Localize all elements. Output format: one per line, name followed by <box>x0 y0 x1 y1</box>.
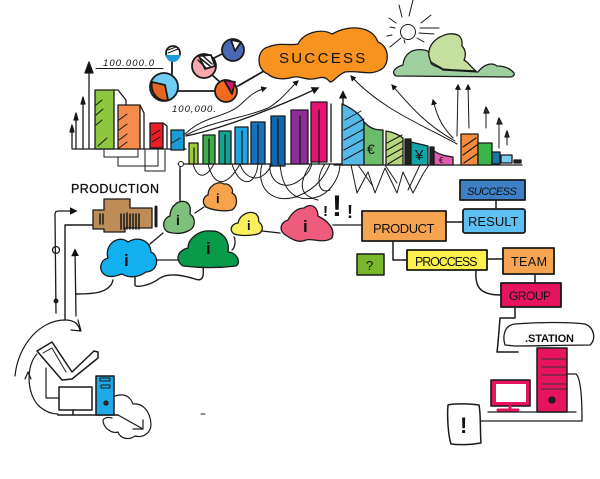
alert box <box>448 404 481 445</box>
cloud outline with arrow <box>103 395 151 439</box>
exclamation marks: ! <box>323 203 328 220</box>
info cloud: orange: i <box>216 191 220 206</box>
success cloud <box>259 28 387 82</box>
chart: currency area: € <box>367 141 375 157</box>
chart: currency area: € <box>439 156 444 165</box>
info cloud: blue: i <box>124 251 129 270</box>
zigzag lines <box>351 165 429 193</box>
exclamation marks <box>323 190 353 223</box>
pie network <box>150 39 264 102</box>
trend arrows <box>185 81 318 136</box>
production factory <box>65 199 156 320</box>
box: proccess: PROCCESS <box>415 255 479 269</box>
computer: tower <box>537 348 582 420</box>
info cloud: light green: i <box>176 212 180 228</box>
chart: currency area <box>334 92 522 165</box>
sun <box>387 0 439 47</box>
clouds <box>394 34 514 77</box>
connectors <box>393 200 535 352</box>
loops under chart <box>178 162 340 205</box>
box: question <box>357 254 384 275</box>
devices: laptop, monitor, tower <box>25 342 118 415</box>
info cloud: pink: i <box>303 217 308 236</box>
chart: rainbow bars <box>178 102 342 166</box>
success cloud: SUCCESS <box>279 50 368 67</box>
info cloud: dark green: i <box>206 239 211 258</box>
station bubble: .STATION <box>525 333 575 345</box>
box: success: SUCCESS <box>467 186 518 198</box>
label: 100.000.0: 100.000.0 <box>103 58 155 69</box>
arrow: circular top left <box>15 320 81 376</box>
upward arrows <box>351 76 469 144</box>
chart: left column bars <box>70 62 186 171</box>
exclamation marks: ! <box>332 190 342 223</box>
info cloud: pink <box>281 206 333 241</box>
box: result: RESULT <box>468 214 520 229</box>
box: team: TEAM <box>511 255 548 269</box>
label: 100,000: 100,000. <box>172 104 217 115</box>
box: question: ? <box>366 258 373 273</box>
info cloud: light green <box>164 201 194 233</box>
heading: production: PRODUCTION <box>71 182 160 196</box>
info cloud: orange <box>203 183 236 211</box>
box: result <box>463 209 525 233</box>
box: success <box>460 180 525 200</box>
info cloud: yellow: i <box>247 218 251 233</box>
info cloud: blue <box>101 239 157 277</box>
exclamation marks: ! <box>347 202 353 222</box>
flow arrows left <box>52 170 362 316</box>
alert box: ! <box>460 413 467 438</box>
box: product: PRODUCT <box>373 221 436 236</box>
box: group: GROUP <box>509 289 552 303</box>
box: proccess <box>407 250 487 270</box>
info cloud: dark green <box>178 231 238 268</box>
box: team <box>503 248 554 274</box>
chart: currency area: ¥ <box>414 147 424 164</box>
box: product <box>362 211 446 241</box>
box: group <box>501 283 561 307</box>
chart: right bars <box>461 107 521 165</box>
station bubble <box>504 322 594 346</box>
info cloud: yellow <box>231 212 262 236</box>
specks <box>201 413 205 415</box>
computer: monitor <box>481 380 582 421</box>
